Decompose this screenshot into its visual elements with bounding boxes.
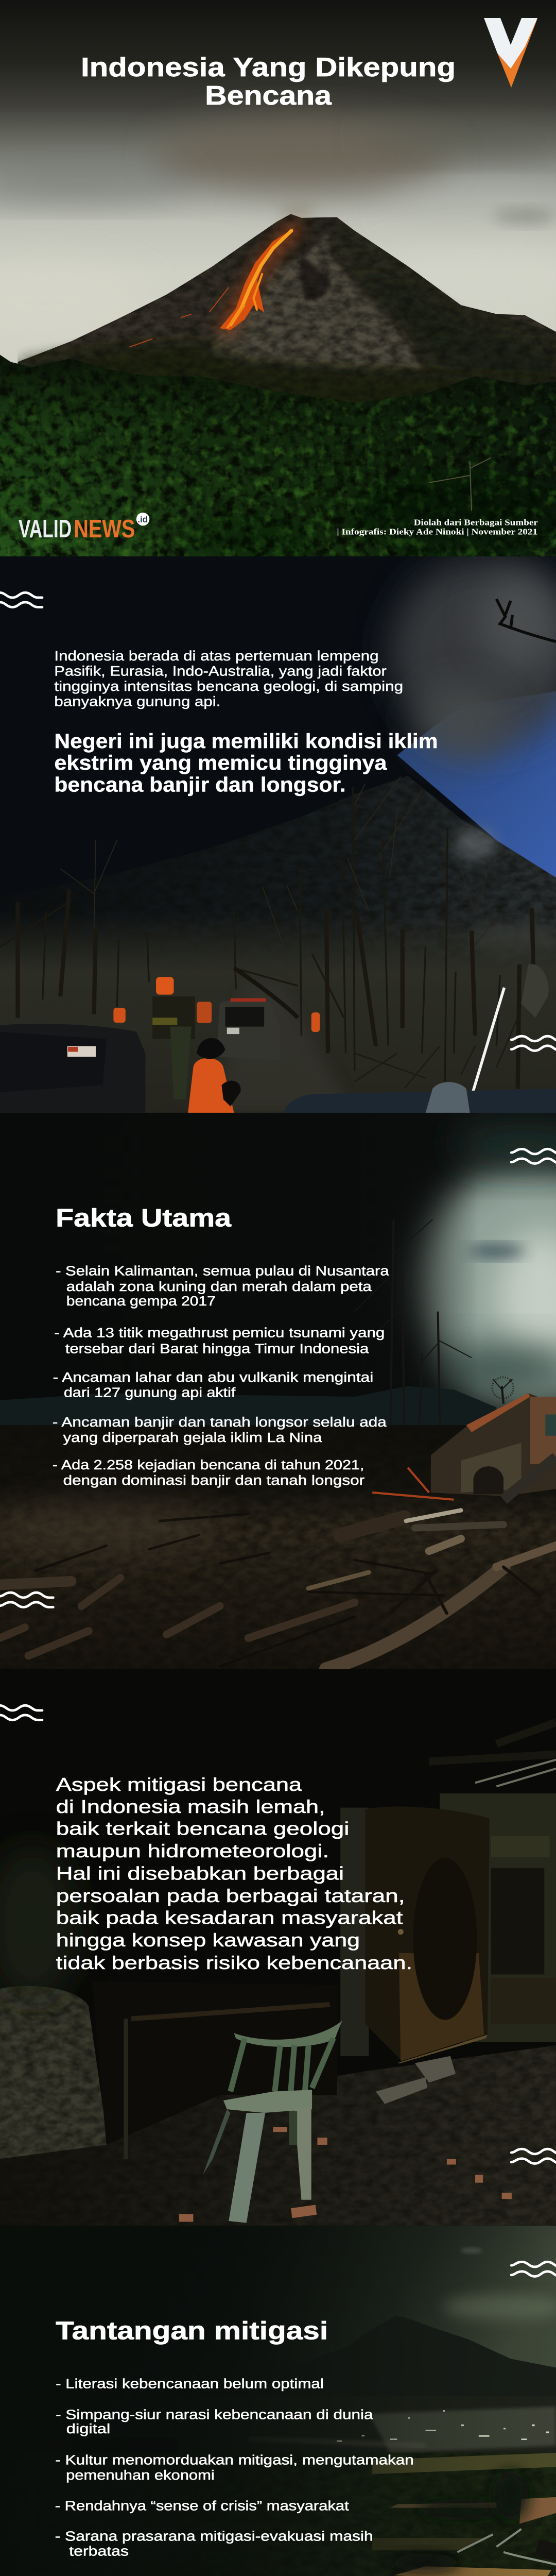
panel: key facts <box>0 1113 556 1669</box>
panel: eruption rescue <box>0 556 556 1113</box>
list: key facts: - Ancaman banjir dan tanah longsor selalu ada <box>53 1414 387 1430</box>
list: mitigation challenges: - Literasi kebencanaan belum optimal <box>56 2376 324 2391</box>
town lights <box>177 2396 556 2456</box>
logo: orange and white V <box>484 18 537 88</box>
list: key facts: - Selain Kalimantan, semua pulau di Nusantara <box>56 1263 389 1278</box>
forest <box>0 355 556 564</box>
text: tectonic intro: banyaknya gunung api. <box>54 694 220 709</box>
list: key facts: bencana gempa 2017 <box>66 1293 216 1309</box>
list: mitigation challenges: digital <box>66 2421 110 2436</box>
text: mitigation statement: maupun hidrometeorologi. <box>56 1841 329 1861</box>
credit text: | Infografis: Dieky Ade Ninoki | November 2021 <box>337 527 537 536</box>
icon: wave bottom left <box>0 1592 53 1607</box>
list: key facts: dengan dominasi banjir dan tanah longsor <box>63 1472 364 1488</box>
list: mitigation challenges: - Simpang-siur narasi kebencanaan di dunia <box>56 2406 373 2422</box>
text: climate statement <box>54 730 438 796</box>
credit text <box>337 517 538 536</box>
sky background <box>0 0 556 391</box>
ambulance and vehicles <box>0 996 280 1113</box>
credit text: Diolah dari Berbagai Sumber <box>414 517 538 527</box>
plastic chair <box>203 2021 342 2223</box>
logo: validnews wordmark <box>19 512 149 538</box>
list: mitigation challenges: - Kultur menomorduakan mitigasi, mengutamakan <box>55 2452 414 2468</box>
text: mitigation statement: hingga konsep kawasan yang <box>56 1930 360 1951</box>
icon: wave top left <box>0 1705 42 1720</box>
rice fields <box>0 2453 556 2576</box>
mountain slope <box>0 776 556 989</box>
evening sky <box>0 2226 556 2438</box>
icon: wave top right <box>511 1149 556 1163</box>
list: mitigation challenges: pemenuhan ekonomi <box>66 2467 215 2483</box>
list: mitigation challenges <box>54 2376 414 2576</box>
text: climate statement: ekstrim yang memicu tingginya <box>54 752 387 774</box>
text: mitigation statement: persoalan pada berbagai tataran, <box>56 1886 405 1906</box>
list: key facts: - Ancaman lahar dan abu vulkanik mengintai <box>53 1369 373 1385</box>
text: tectonic intro: Indonesia berada di atas pertemuan lempeng <box>54 648 379 664</box>
lava flow <box>129 228 294 347</box>
icon: wave bottom right <box>511 2149 556 2163</box>
burnt ground <box>0 911 556 1113</box>
logo: validnews wordmark: .id <box>137 514 148 524</box>
text: mitigation statement: baik pada kesadaran masyarakat <box>56 1908 403 1928</box>
hut and unfinished building <box>308 2540 556 2576</box>
icon: wave top left <box>0 592 42 607</box>
logo: validnews wordmark: NEWS <box>74 514 135 543</box>
text: climate statement: Negeri ini juga memiliki kondisi iklim <box>54 730 438 753</box>
dark room wall <box>0 1669 556 2226</box>
logo: validnews wordmark: VALID <box>19 514 72 543</box>
list: mitigation challenges: terbatas <box>69 2544 129 2559</box>
text: tectonic intro: tingginya intensitas bencana geologi, di samping <box>54 679 403 694</box>
stormy sky <box>0 1113 556 1468</box>
list: key facts: tersebar dari Barat hingga Timur Indonesia <box>65 1341 369 1356</box>
list: key facts: - Ada 2.258 kejadian bencana di tahun 2021, <box>53 1457 364 1472</box>
text: mitigation statement: baik terkait bencana geologi <box>56 1819 349 1839</box>
panel: mitigation interior <box>0 1669 556 2226</box>
winding road <box>454 2529 556 2576</box>
ruined house <box>372 1393 556 1500</box>
burnt trees <box>0 776 534 1089</box>
night sky and smoke <box>0 556 556 897</box>
burnt tree silhouettes <box>355 1219 513 1450</box>
list: mitigation challenges: - Sarana prasarana mitigasi-evakuasi masih <box>55 2529 373 2544</box>
wardrobe <box>365 1806 490 2104</box>
text: mitigation statement: Aspek mitigasi bencana <box>56 1774 302 1795</box>
fallen logs <box>0 1510 556 1669</box>
list: key facts: yang diperparah gejala iklim La Nina <box>63 1430 322 1445</box>
floor rubble <box>179 2127 512 2222</box>
title <box>82 57 454 105</box>
list: mitigation challenges: - Rendahnya “sense of crisis” masyarakat <box>55 2498 350 2513</box>
panel: cover volcano <box>0 0 556 564</box>
text: climate statement: bencana banjir dan longsor. <box>54 774 346 796</box>
text: mitigation statement: tidak berbasis risiko kebencanaan. <box>56 1953 412 1973</box>
text: mitigation statement <box>56 1774 412 1973</box>
text: mitigation statement: di Indonesia masih lemah, <box>56 1797 325 1817</box>
ceiling beams <box>429 1722 556 1786</box>
list: key facts: dari 127 gunung api aktif <box>64 1385 236 1400</box>
volcano <box>18 214 556 419</box>
text: mitigation statement: Hal ini disebabkan berbagai <box>56 1863 344 1884</box>
title: Bencana <box>205 81 332 111</box>
text: tectonic intro: Pasifik, Eurasia, Indo-Australia, yang jadi faktor <box>54 663 387 679</box>
heading: Fakta Utama <box>56 1203 232 1232</box>
text: tectonic intro <box>54 648 403 709</box>
floor <box>0 2045 556 2226</box>
white antenna streak and vehicle light <box>284 964 556 1113</box>
rescue workers <box>113 977 320 1113</box>
desk <box>92 1981 337 2159</box>
list: key facts <box>53 1263 389 1488</box>
volcano silhouette <box>213 2316 556 2425</box>
list: key facts: adalah zona kuning dan merah dalam peta <box>66 1279 372 1294</box>
heading: Tantangan mitigasi <box>56 2316 328 2345</box>
ground and debris <box>0 1425 556 1669</box>
icon: wave top right <box>511 2262 556 2276</box>
panel: mitigation challenges <box>0 2226 556 2576</box>
icon: wave bottom right <box>511 1036 556 1050</box>
left dark overlay <box>0 2226 556 2576</box>
title: Indonesia Yang Dikepung <box>81 53 456 82</box>
list: key facts: - Ada 13 titik megathrust pemicu tsunami yang <box>54 1325 385 1340</box>
